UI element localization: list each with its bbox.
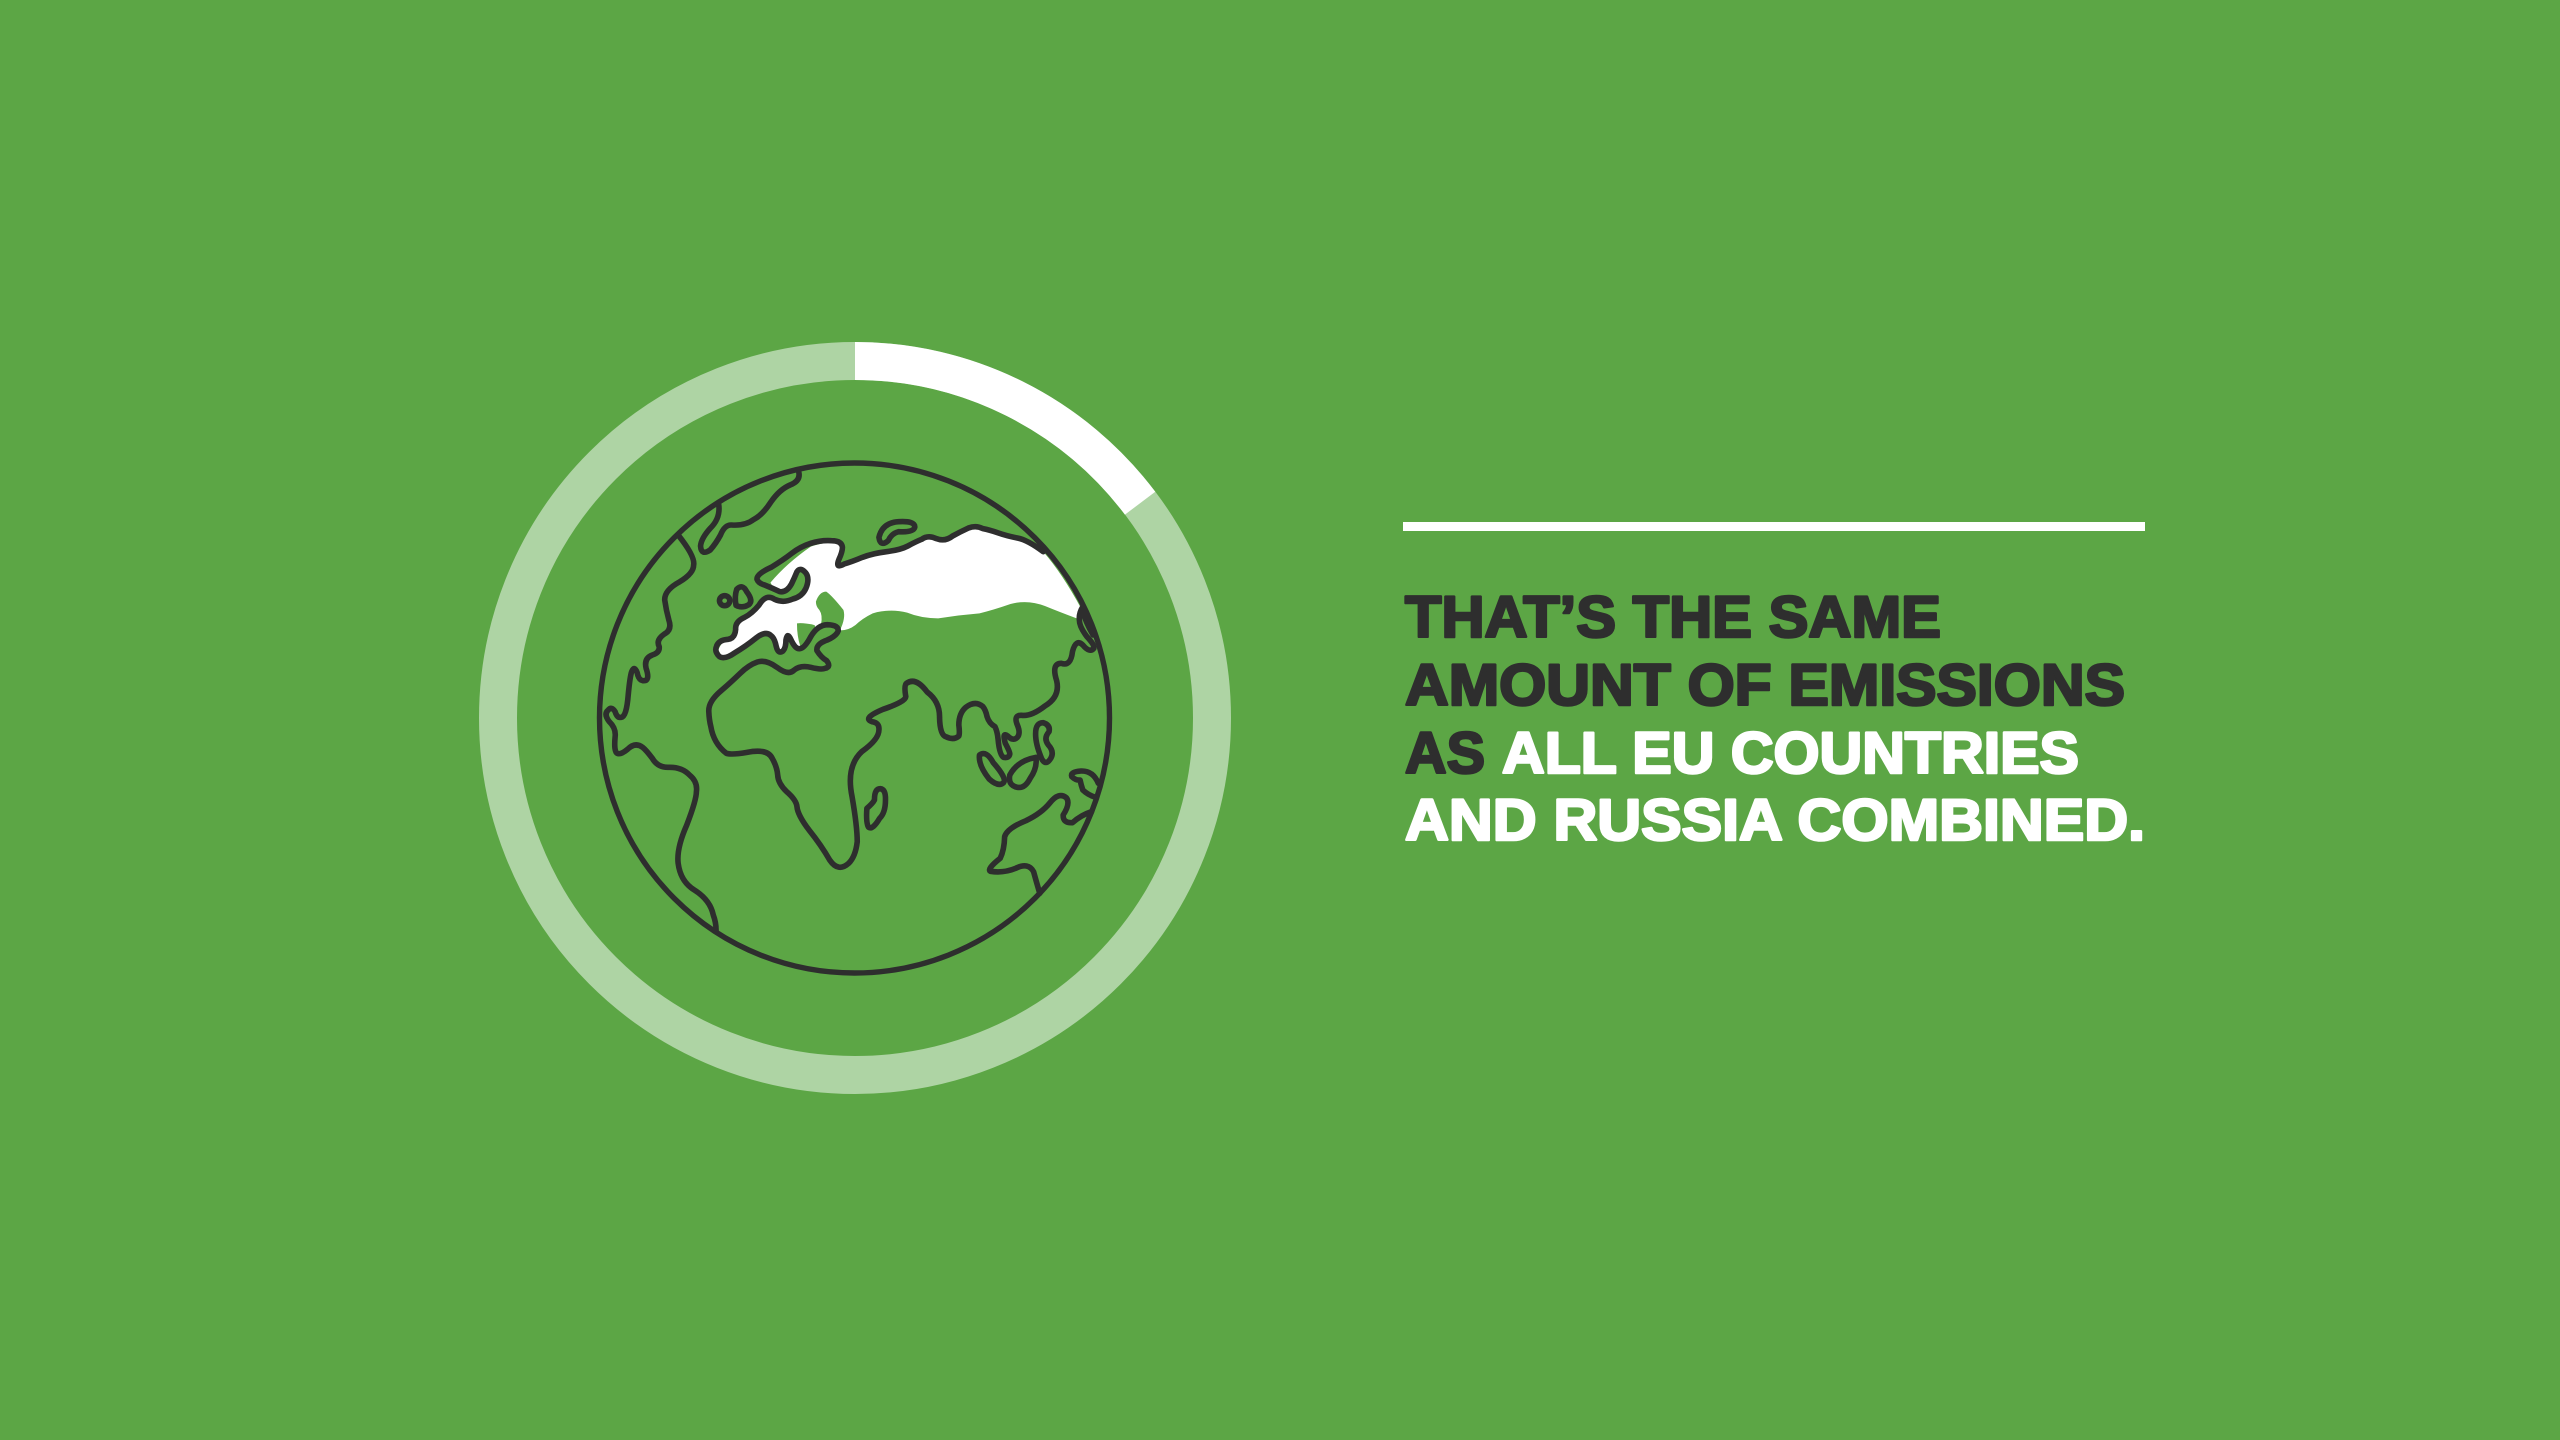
coastline: Australia xyxy=(990,796,1091,893)
rule above text xyxy=(1403,522,2145,531)
line 4: AND RUSSIA COMBINED. xyxy=(1405,788,2145,853)
icon: globe xyxy=(600,463,1110,973)
coastline: Eurasia and Africa xyxy=(709,527,1094,867)
coastline: Greenland xyxy=(701,472,799,552)
coastline: far east inlet xyxy=(1082,610,1093,635)
coastline: Americas xyxy=(606,535,716,932)
line 2: AMOUNT OF EMISSIONS xyxy=(1405,653,2125,718)
island: Borneo xyxy=(1009,757,1036,787)
island: Sumatra xyxy=(979,754,1004,784)
island: Madagascar xyxy=(867,789,885,828)
island: Iceland-side dot xyxy=(719,596,730,606)
text block: statement xyxy=(1405,585,2145,853)
line 3 dark part: AS xyxy=(1405,721,1485,786)
highlighted region: EU and Russia xyxy=(718,528,1081,656)
island: Svalbard xyxy=(879,522,915,543)
excluded area: Balkan wedge xyxy=(797,623,815,647)
island: New Guinea xyxy=(1072,771,1098,797)
globe outline xyxy=(600,463,1110,973)
progress ring xyxy=(498,361,1212,1075)
world map xyxy=(606,472,1098,932)
ring highlighted share xyxy=(855,361,1140,503)
island: Philippines xyxy=(1036,723,1052,762)
ring track xyxy=(498,361,1212,1075)
island: Great Britain xyxy=(735,587,751,607)
line 3 white part: ALL EU COUNTRIES xyxy=(1502,721,2079,786)
line 1: THAT’S THE SAME xyxy=(1405,585,1941,650)
excluded area: Black Sea region xyxy=(816,592,844,630)
